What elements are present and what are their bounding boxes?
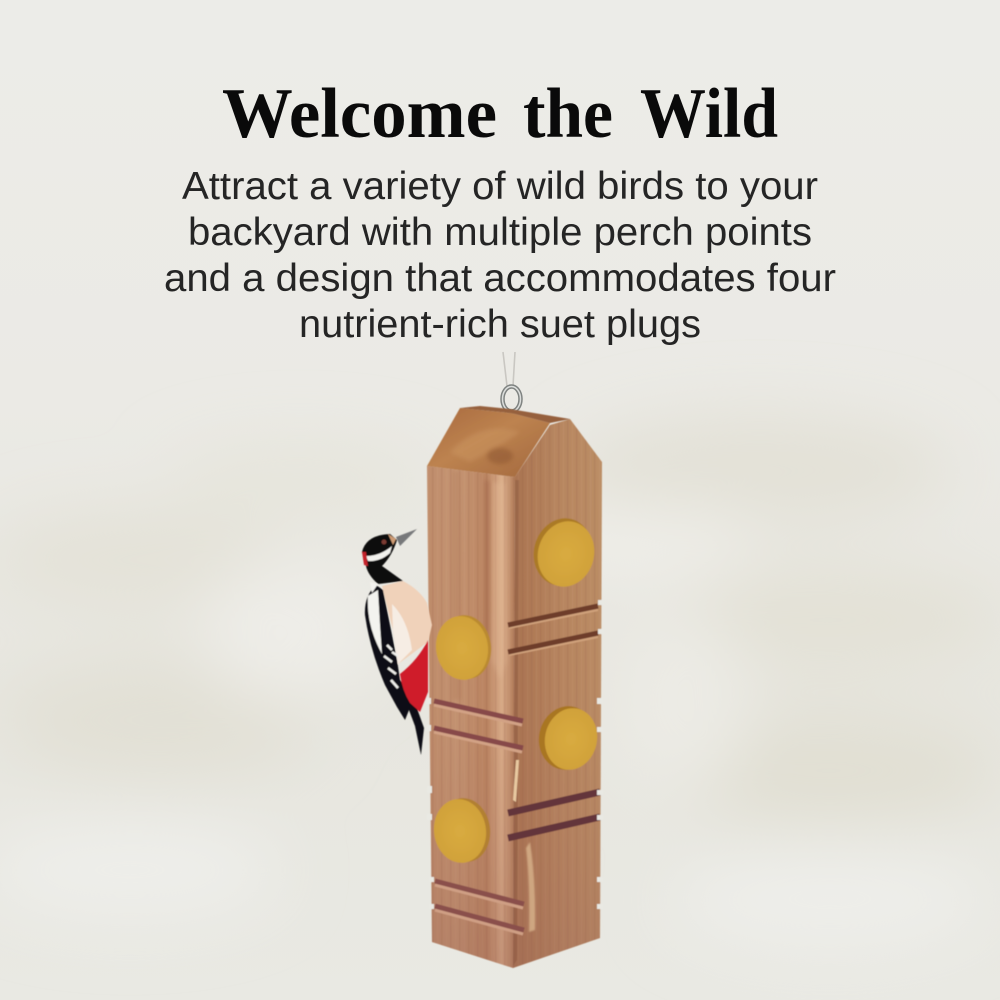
bird belly [382, 581, 432, 664]
grooves right side upper [508, 606, 598, 655]
bird head [362, 534, 403, 584]
title [222, 75, 778, 153]
feeder roof [427, 406, 570, 477]
title: Wild [640, 75, 778, 153]
woodpecker [362, 529, 432, 755]
description text: backyard with multiple perch points [188, 211, 812, 254]
bird red underside [400, 640, 428, 712]
description text: Attract a variety of wild birds to your [182, 165, 818, 208]
feeder left face [427, 466, 515, 968]
title: Welcome [222, 75, 497, 153]
bird beak [396, 529, 417, 546]
suet plug middle right [533, 701, 603, 775]
description text: and a design that accommodates four [164, 257, 836, 300]
suet plug middle left [432, 612, 495, 683]
grooves right side lower [508, 792, 600, 838]
bird feeder [426, 406, 604, 968]
hanging wire and eye hook [502, 352, 520, 412]
description text: nutrient-rich suet plugs [299, 303, 701, 346]
suet plug lower left [430, 795, 494, 866]
bird wing and tail [365, 585, 424, 755]
edge notches [426, 600, 604, 909]
feeder right face [513, 419, 602, 968]
title: the [523, 75, 613, 153]
suet plug top right [526, 512, 602, 593]
description text [164, 165, 836, 346]
grooves left side [434, 701, 524, 934]
